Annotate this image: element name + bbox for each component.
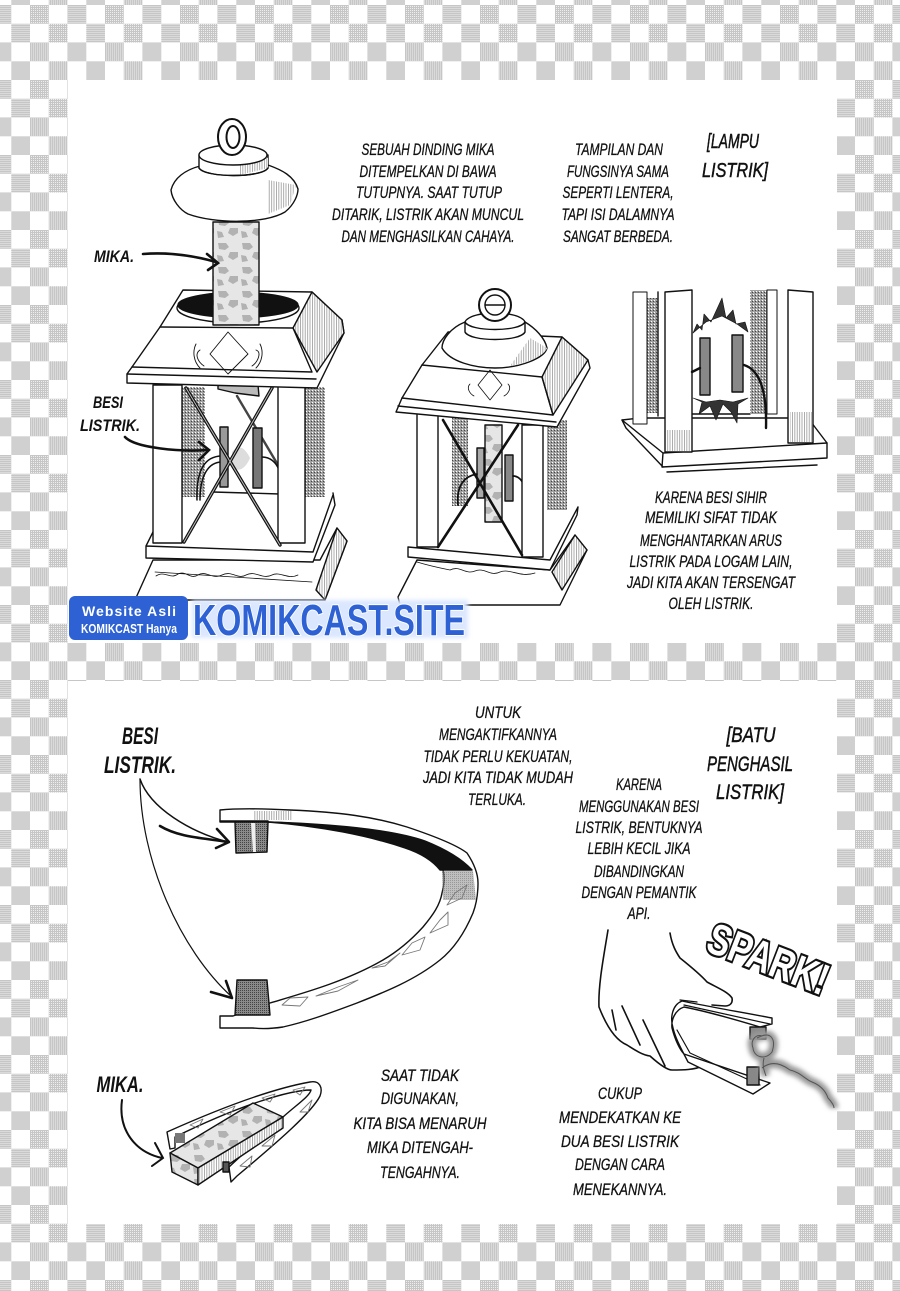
- crossed bars: [184, 388, 280, 545]
- crossed bars: [438, 420, 522, 555]
- small igniter with mica: [167, 1082, 321, 1185]
- posts: [633, 290, 813, 452]
- text: cukup mendekatkan: DUA BESI LISTRIK: [561, 1133, 680, 1151]
- igniter tool large: [220, 809, 478, 1029]
- text: besi listrik lebih kecil: LISTRIK, BENTUKNYA: [576, 819, 702, 837]
- text: tampilan: SANGAT BERBEDA.: [563, 228, 673, 246]
- posts: [153, 385, 305, 543]
- text: besi listrik lebih kecil: DENGAN PEMANTIK: [582, 884, 697, 902]
- hatched curve: [442, 871, 476, 900]
- panel: lampu listrik: [68, 80, 837, 645]
- text: besi sihir: MEMILIKI SIFAT TIDAK: [645, 509, 778, 527]
- small assembled lantern: [396, 289, 590, 605]
- base: [398, 507, 587, 605]
- label: besi listrik: [80, 393, 140, 435]
- wires: [692, 365, 766, 428]
- roof: [396, 332, 590, 427]
- hand outline: [599, 930, 732, 1070]
- text: dinding mika: SEBUAH DINDING MIKA: [362, 141, 494, 159]
- text: besi sihir: OLEH LISTRIK.: [668, 595, 754, 613]
- text: cukup mendekatkan: CUKUP: [598, 1085, 642, 1103]
- base plate: [622, 418, 827, 467]
- text: mengaktifkan: JADI KITA TIDAK MUDAH: [422, 769, 573, 787]
- text: tampilan: TAPI ISI DALAMNYA: [562, 206, 674, 224]
- text: tampilan: FUNGSINYA SAMA: [567, 163, 669, 181]
- electrodes: [750, 1027, 766, 1039]
- text: besi listrik lebih kecil: API.: [627, 905, 650, 923]
- label: besi listrik: BESI: [122, 723, 159, 750]
- text: tampilan: TAMPILAN DAN: [575, 141, 663, 159]
- heading: batu penghasil listrik: LISTRIK]: [716, 781, 785, 804]
- text: dinding mika: DITEMPELKAN DI BAWA: [360, 163, 496, 181]
- arrow: mika: [121, 1100, 163, 1166]
- lightning: [752, 1035, 834, 1108]
- text: tampilan: [562, 141, 674, 246]
- watermark title: KOMIKCAST.SITE: [193, 596, 465, 645]
- text: tampilan: SEPERTI LENTERA,: [562, 184, 674, 202]
- text: dinding mika: [332, 141, 524, 246]
- mica block: [170, 1103, 283, 1168]
- heading: lampu listrik: [702, 131, 768, 182]
- spark burst: [693, 298, 748, 423]
- heading: batu penghasil listrik: [BATU: [726, 724, 776, 747]
- text: besi sihir: LISTRIK PADA LOGAM LAIN,: [630, 553, 792, 571]
- mica column: [213, 222, 259, 325]
- text: besi sihir: JADI KITA AKAN TERSENGAT: [626, 574, 796, 592]
- heading: lampu listrik: LISTRIK]: [702, 160, 768, 182]
- arrow: mika: [143, 253, 218, 270]
- label: besi listrik: BESI: [93, 393, 124, 412]
- text: mengaktifkan: MENGAKTIFKANNYA: [439, 726, 557, 744]
- text: mengaktifkan: TIDAK PERLU KEKUATAN,: [424, 748, 572, 766]
- label: besi listrik: [104, 723, 176, 779]
- watermark badge text: [81, 603, 178, 636]
- text: saat tidak digunakan: KITA BISA MENARUH: [354, 1115, 487, 1133]
- arrow: besi listrik: [125, 437, 209, 460]
- text: dinding mika: TUTUPNYA. SAAT TUTUP: [356, 184, 502, 202]
- text: mengaktifkan: UNTUK: [475, 704, 522, 722]
- lantern base: [135, 492, 347, 600]
- plates: [700, 335, 743, 395]
- detail: spark between plates: [622, 290, 827, 472]
- label: besi listrik: LISTRIK.: [104, 752, 176, 779]
- text: saat tidak digunakan: SAAT TIDAK: [381, 1067, 460, 1085]
- label: besi listrik: LISTRIK.: [80, 416, 140, 435]
- text: cukup mendekatkan: MENEKANNYA.: [573, 1181, 667, 1199]
- text: mengaktifkan: TERLUKA.: [468, 791, 526, 809]
- text: mengaktifkan: [422, 704, 573, 809]
- tool body: [220, 809, 478, 1029]
- text: saat tidak digunakan: TENGAHNYA.: [380, 1164, 460, 1182]
- watermark badge: [69, 596, 188, 640]
- lid: [171, 119, 298, 221]
- panel: batu penghasil listrik: [68, 681, 837, 1224]
- watermark glow: [192, 600, 468, 638]
- large lantern with lifted lid: [127, 119, 347, 600]
- black shaded inside curve: [268, 822, 472, 870]
- text: besi sihir: KARENA BESI SIHIR: [655, 489, 767, 507]
- igniter band: [167, 1082, 321, 1182]
- band diamonds: [190, 1087, 312, 1167]
- text: saat tidak digunakan: [354, 1067, 487, 1182]
- tool: [672, 1001, 772, 1094]
- hand pressing igniter: [599, 930, 772, 1094]
- text: cukup mendekatkan: MENDEKATKAN KE: [559, 1109, 682, 1127]
- text: besi sihir: MENGHANTARKAN ARUS: [640, 532, 782, 550]
- text: besi listrik lebih kecil: KARENA: [616, 776, 662, 794]
- posts: [417, 410, 543, 557]
- stipple and inner parts: [452, 418, 567, 522]
- text: besi listrik lebih kecil: [576, 776, 702, 923]
- heading: lampu listrik: [LAMPU: [706, 131, 759, 153]
- top electrode: [235, 822, 268, 853]
- text: besi sihir: [626, 489, 796, 613]
- watermark badge text: KOMIKCAST Hanya: [81, 621, 178, 636]
- stippled panels: [647, 290, 767, 414]
- label: mika: MIKA.: [94, 247, 134, 266]
- text: saat tidak digunakan: MIKA DITENGAH-: [367, 1139, 473, 1157]
- arrows: besi listrik: [140, 779, 232, 998]
- dome and cap: [442, 289, 547, 368]
- text: saat tidak digunakan: DIGUNAKAN,: [381, 1090, 459, 1108]
- lantern roof: [127, 290, 344, 388]
- heading: batu penghasil listrik: PENGHASIL: [707, 753, 793, 776]
- stippled back panels: [178, 387, 325, 497]
- text: dinding mika: DITARIK, LISTRIK AKAN MUNCUL: [332, 206, 524, 224]
- watermark badge text: Website Asli: [82, 603, 176, 619]
- diamond pattern: [282, 885, 467, 1006]
- inner mechanism: [197, 385, 280, 500]
- watermark: [69, 596, 468, 645]
- text: besi listrik lebih kecil: LEBIH KECIL JIKA: [588, 840, 690, 858]
- bottom electrode: [235, 980, 270, 1015]
- heading: batu penghasil listrik: [707, 724, 793, 804]
- text: besi listrik lebih kecil: MENGGUNAKAN BESI: [579, 798, 699, 816]
- text: dinding mika: DAN MENGHASILKAN CAHAYA.: [342, 228, 514, 246]
- text: cukup mendekatkan: DENGAN CARA: [575, 1156, 665, 1174]
- spark sound effect: SPARK!: [701, 914, 836, 1005]
- label: mika: MIKA.: [96, 1072, 144, 1097]
- text: cukup mendekatkan: [559, 1085, 682, 1199]
- text: besi listrik lebih kecil: DIBANDINGKAN: [594, 863, 684, 881]
